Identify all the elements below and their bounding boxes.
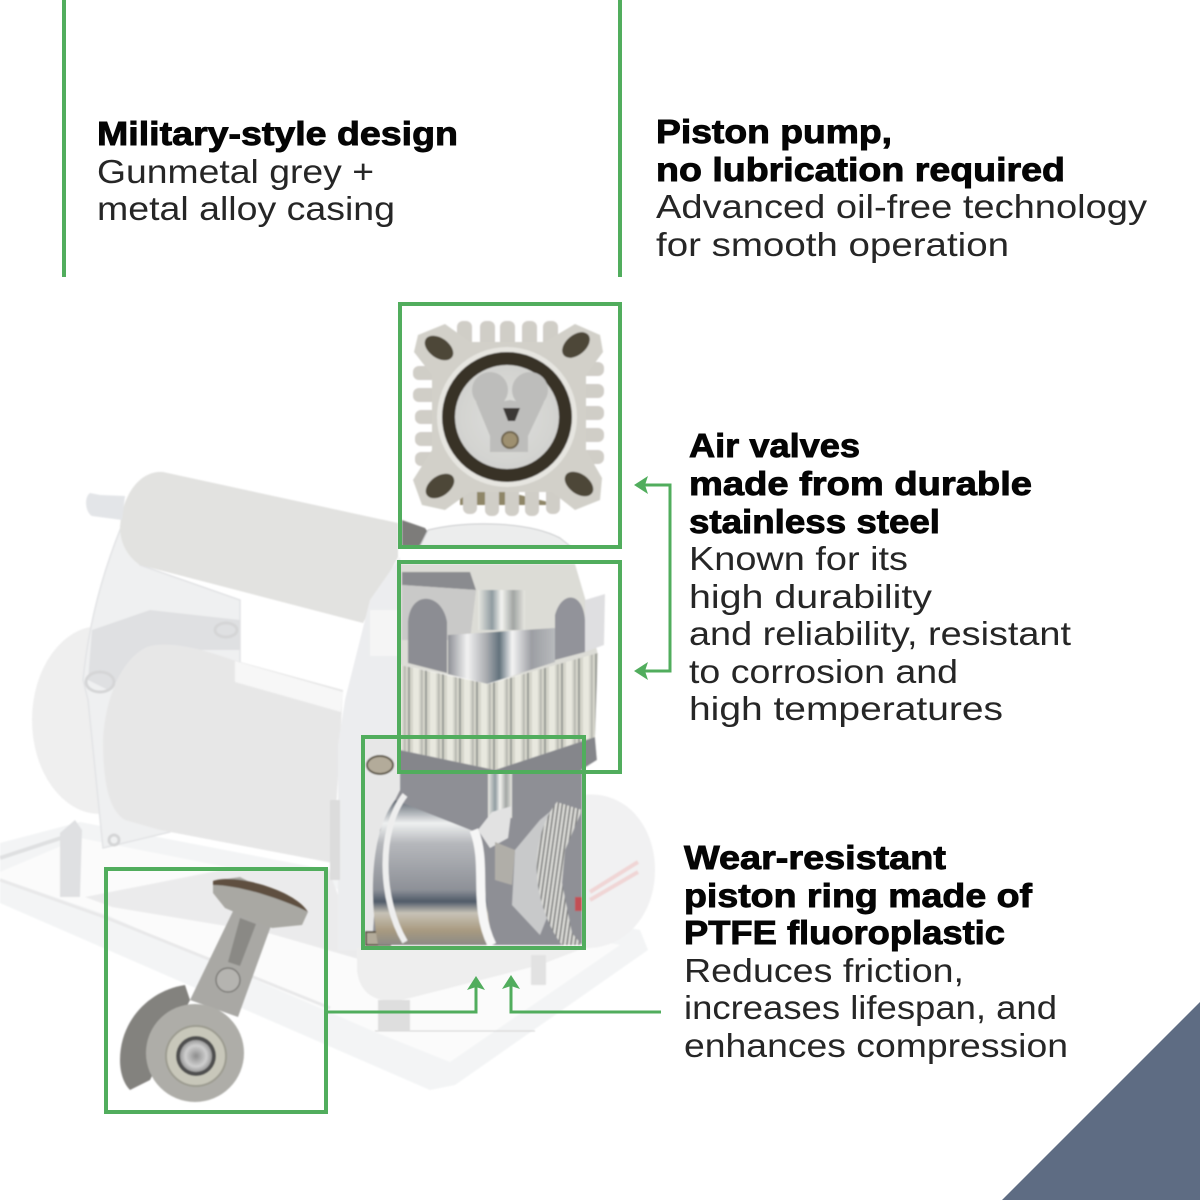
callout photo: air valve gear	[402, 321, 604, 546]
pump side fins	[370, 610, 400, 656]
dark top shell	[402, 572, 476, 590]
body: metal alloy casing	[97, 190, 395, 227]
rod logo	[216, 968, 240, 992]
green frame: gear	[400, 304, 620, 547]
tank valve stub	[86, 493, 125, 520]
gasket ring	[437, 347, 577, 487]
motor end cap	[32, 626, 168, 814]
heading: Wear-resistant	[684, 839, 946, 876]
left lobe	[408, 599, 447, 673]
foot post right	[531, 955, 546, 985]
body: Advanced oil-free technology	[656, 188, 1148, 225]
heading: no lubrication required	[656, 151, 1065, 188]
body: Reduces friction,	[684, 952, 964, 989]
arrow: piston ring text to pump	[502, 975, 661, 1012]
body: for smooth operation	[656, 226, 1009, 263]
body: Known for its	[689, 540, 908, 577]
body: enhances compression	[684, 1027, 1068, 1064]
body: to corrosion and	[689, 653, 958, 690]
body: high temperatures	[689, 690, 1003, 727]
heading: Military-style design	[97, 115, 458, 152]
body: high durability	[689, 578, 933, 615]
upper white backing	[400, 564, 618, 770]
chrome top	[400, 564, 598, 683]
mounting screws	[366, 756, 393, 945]
coupling nut	[495, 842, 515, 885]
gear teeth	[413, 321, 604, 516]
callout photo: pump cylinder and motor coupling	[365, 739, 582, 945]
corner triangle	[1002, 1002, 1200, 1200]
tank corner behind gear	[402, 520, 430, 546]
body: and reliability, resistant	[689, 615, 1071, 652]
right end cap	[583, 795, 655, 948]
heading: Air valves	[689, 427, 860, 464]
text block: military-style design	[97, 115, 458, 227]
big end	[146, 1004, 244, 1102]
chrome inner ring	[512, 806, 557, 935]
red print on cap	[575, 897, 582, 911]
motor housing	[103, 645, 343, 863]
pump feet	[357, 948, 584, 1001]
top-left vertical rule	[62, 0, 66, 277]
motor end knurl	[330, 800, 340, 880]
piston head	[213, 877, 308, 928]
foot post left	[378, 1000, 410, 1031]
valve reed	[472, 372, 548, 452]
mounting bracket	[83, 530, 240, 848]
callout photo: piston rod	[120, 877, 308, 1102]
knurled dial	[537, 802, 582, 945]
callout photo: cylinder head	[400, 564, 618, 772]
dial cap	[562, 810, 582, 945]
finned cylinder	[400, 653, 598, 770]
heading: made from durable	[689, 465, 1032, 502]
bracket shaded wedge	[88, 610, 240, 690]
clamp ring	[385, 795, 405, 942]
upper-left chrome corner	[365, 739, 400, 945]
faded compressor photo background	[0, 472, 655, 1090]
text block: piston pump	[656, 113, 1148, 263]
bearing	[166, 1026, 226, 1086]
cooling fins behind gear	[420, 524, 570, 546]
gear body	[413, 324, 603, 510]
pump side fade	[338, 557, 400, 950]
right lobe	[555, 598, 585, 660]
side tab	[585, 594, 605, 652]
heading: piston ring made of	[684, 877, 1033, 914]
heading: PTFE fluoroplastic	[684, 914, 1005, 951]
counterweight	[120, 985, 190, 1090]
head band	[448, 628, 555, 684]
grey backing	[365, 739, 582, 945]
valve screw	[502, 432, 518, 448]
heading: stainless steel	[689, 503, 940, 540]
connecting tube	[488, 772, 512, 818]
text block: piston ring	[684, 839, 1068, 1064]
arrow: piston rod to pump	[328, 976, 485, 1012]
reed notch	[503, 408, 520, 421]
cylinder flange	[474, 830, 492, 945]
green frame: piston rod	[106, 869, 326, 1112]
top-middle vertical rule	[618, 0, 622, 277]
connecting rod	[190, 907, 272, 1017]
green frame: lower pump	[363, 737, 584, 948]
air tank	[120, 472, 398, 623]
base plate	[0, 822, 648, 1090]
text block: air valves	[689, 427, 1071, 727]
gear tooth shadows	[440, 350, 585, 505]
corner slots	[420, 327, 598, 503]
centre pillar	[478, 590, 525, 630]
chrome cylinder	[373, 800, 492, 945]
faded cap red print	[590, 862, 638, 900]
arrow bracket: air valves	[634, 476, 670, 680]
bracket bolts	[86, 623, 237, 845]
body: Gunmetal grey +	[97, 153, 374, 190]
grey base	[400, 737, 597, 772]
body: increases lifespan, and	[684, 989, 1057, 1026]
left leg post	[60, 820, 82, 897]
green frame: cylinder head	[399, 562, 620, 772]
heading: Piston pump,	[656, 113, 892, 150]
